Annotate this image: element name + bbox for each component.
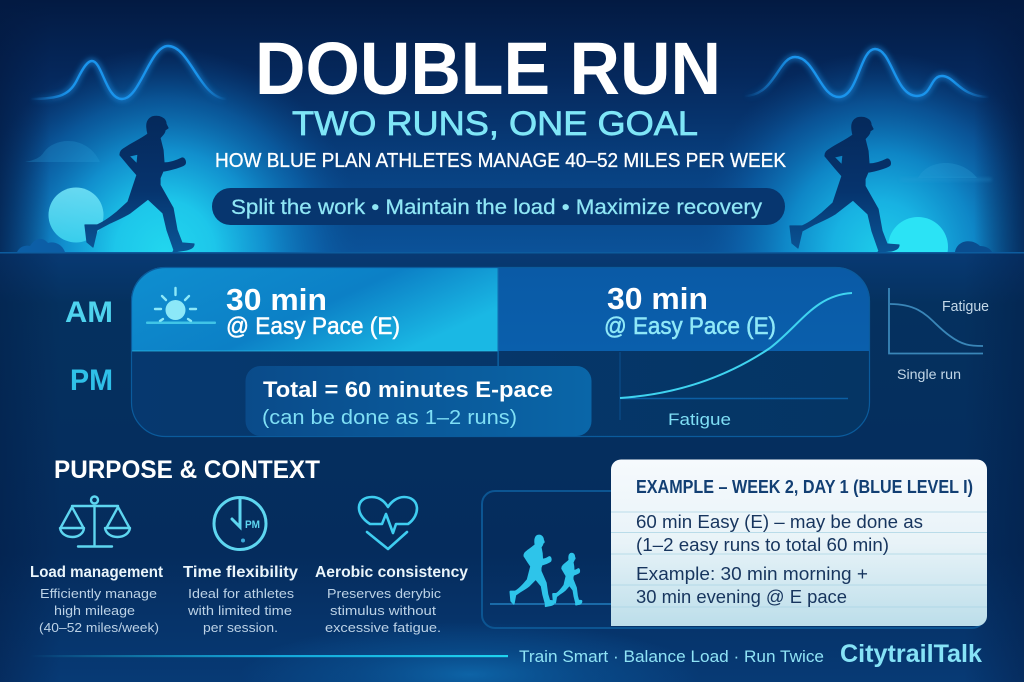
label: AM: AM bbox=[65, 296, 113, 329]
item: aerobic consistency bbox=[315, 564, 468, 635]
footer brand: CitytrailTalk bbox=[840, 640, 982, 668]
chart: single run bbox=[889, 288, 989, 382]
chart: single run: Single run bbox=[897, 366, 961, 382]
label: PM: PM bbox=[70, 364, 113, 397]
ground line bbox=[490, 603, 615, 605]
callout: total bbox=[246, 366, 592, 436]
item: time flexibility: per session. bbox=[203, 621, 278, 635]
callout: total: (can be done as 1–2 runs) bbox=[262, 407, 517, 429]
icon: PM clock bbox=[214, 498, 266, 550]
item: load management: Efficiently manage bbox=[40, 587, 157, 601]
title: DOUBLE RUN bbox=[255, 27, 721, 110]
text: AM first run: 30 min bbox=[226, 282, 327, 317]
item: aerobic consistency: Aerobic consistency bbox=[315, 564, 468, 581]
scenery: right sun and clouds bbox=[888, 163, 992, 252]
text: second run: 30 min bbox=[607, 281, 708, 316]
chart: double run fatigue curve bbox=[620, 293, 852, 429]
chart: double run fatigue curve: Fatigue bbox=[668, 410, 731, 429]
item: aerobic consistency: stimulus without bbox=[330, 604, 437, 618]
footer line bbox=[30, 655, 508, 657]
panel: schedule bbox=[131, 267, 870, 437]
item: aerobic consistency: excessive fatigue. bbox=[325, 621, 441, 635]
header background bbox=[0, 0, 1024, 252]
panel: example outline bbox=[482, 491, 985, 628]
item: load management bbox=[30, 564, 163, 635]
chart: single run: Fatigue bbox=[942, 299, 989, 315]
icon: heart with pulse bbox=[359, 497, 417, 549]
icon: balance scale bbox=[60, 496, 130, 546]
scenery: left sun and clouds bbox=[17, 141, 104, 252]
pill: key points bbox=[212, 188, 785, 225]
runner: left silhouette bbox=[85, 116, 194, 252]
icon: sunrise bbox=[146, 288, 216, 324]
panel: schedule: @ Easy Pace (E) bbox=[226, 313, 400, 340]
card: example: 30 min evening @ E pace bbox=[636, 587, 847, 607]
card: example: Example: 30 min morning + bbox=[636, 564, 868, 584]
icon: PM clock: PM bbox=[245, 519, 260, 531]
lower background bbox=[0, 252, 1024, 682]
subtitle: TWO RUNS, ONE GOAL bbox=[292, 105, 698, 143]
item: time flexibility: Ideal for athletes bbox=[188, 587, 294, 601]
wave: right bbox=[744, 49, 989, 97]
runner: right silhouette bbox=[790, 117, 899, 252]
heading: purpose and context: PURPOSE & CONTEXT bbox=[54, 456, 320, 484]
card: example bbox=[611, 460, 987, 626]
icon: two runners bbox=[510, 536, 581, 606]
wave: left bbox=[30, 46, 227, 99]
card: example: EXAMPLE – WEEK 2, DAY 1 (BLUE LEVEL I) bbox=[636, 476, 973, 497]
pill: key points: Split the work • Maintain the load • Maximize recovery bbox=[231, 196, 763, 219]
item: time flexibility: Time flexibility bbox=[183, 564, 298, 581]
callout: total: Total = 60 minutes E-pace bbox=[263, 377, 553, 402]
panel: schedule: @ Easy Pace (E) bbox=[604, 313, 776, 340]
item: load management: Load management bbox=[30, 564, 163, 581]
tagline: HOW BLUE PLAN ATHLETES MANAGE 40–52 MILES PER WEEK bbox=[215, 150, 787, 172]
item: aerobic consistency: Preserves derybic bbox=[327, 587, 441, 601]
card: example: (1–2 easy runs to total 60 min) bbox=[636, 535, 889, 555]
footer tagline: Train Smart · Balance Load · Run Twice bbox=[519, 647, 824, 666]
item: load management: (40–52 miles/week) bbox=[39, 621, 159, 635]
card: example: 60 min Easy (E) – may be done as bbox=[636, 512, 923, 532]
item: load management: high mileage bbox=[54, 604, 135, 618]
item: time flexibility bbox=[183, 564, 298, 635]
item: time flexibility: with limited time bbox=[187, 604, 292, 618]
footer glow bbox=[240, 620, 700, 682]
